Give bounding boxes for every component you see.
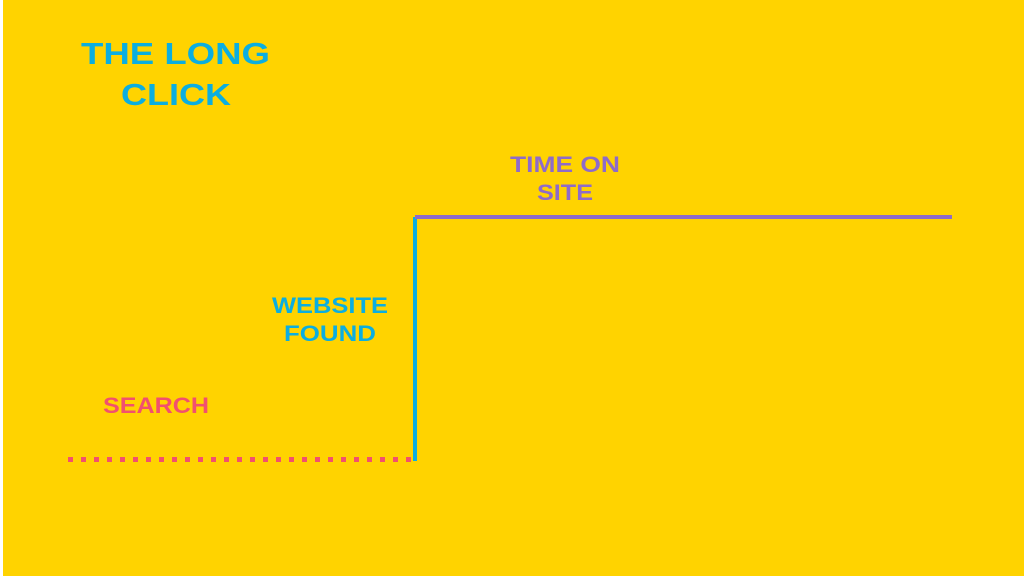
dotted line: search	[68, 457, 414, 462]
label: website found	[272, 293, 388, 346]
label: search: SEARCH	[103, 393, 209, 418]
vertical line: website found	[413, 217, 417, 461]
label: time on site: SITE	[537, 180, 593, 205]
title	[81, 36, 270, 112]
label: website found: FOUND	[284, 321, 376, 346]
label: time on site	[510, 152, 620, 205]
title: CLICK	[121, 77, 232, 112]
label: time on site: TIME ON	[510, 152, 620, 177]
horizontal line: time on site	[415, 215, 952, 219]
label: website found: WEBSITE	[272, 293, 388, 318]
title: THE LONG	[81, 36, 270, 71]
